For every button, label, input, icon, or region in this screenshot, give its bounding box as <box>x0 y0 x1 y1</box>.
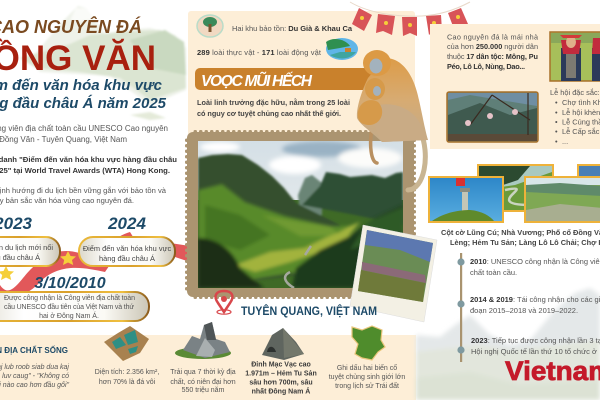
text: area: hơn 70% là đá vôi <box>99 379 156 386</box>
background: faded mountains behind title <box>20 6 186 120</box>
photo: Lung Cu flag tower <box>429 177 503 222</box>
text: festivals: • <box>555 127 558 136</box>
flag 5 <box>448 8 468 29</box>
milestone 2024: 2024 <box>107 214 146 233</box>
text: festivals: • <box>555 137 558 146</box>
icon: conservation logo <box>197 15 223 37</box>
gallery caption <box>441 228 600 247</box>
panel: geology band <box>0 322 416 400</box>
icon: wildlife habitat <box>326 38 358 60</box>
milestone 3/10/2010: hai ở Đông Nam Á. <box>39 311 99 320</box>
panel: stamp photo <box>186 132 414 298</box>
icon: map <box>104 326 149 361</box>
text: ethnic groups: Péo, Lô Lô, Nùng, Dao... <box>447 62 525 71</box>
polaroid photo <box>350 225 437 322</box>
timeline item 2010 <box>457 257 600 277</box>
milestone 2024: Điểm đến văn hóa khu vực <box>83 244 171 253</box>
panel: conservation <box>188 11 415 136</box>
monkey head <box>363 50 391 76</box>
bunting flags <box>350 2 470 36</box>
milestone 3/10/2010: 3/10/2010 <box>34 275 106 292</box>
milestone 2024 <box>79 214 175 266</box>
text: ethnic groups: thuộc 17 dân tộc: Mông, Pu <box>447 52 538 61</box>
text: Mac Vac peak <box>245 362 317 396</box>
timeline item 2010: chất toàn cầu. <box>470 268 517 277</box>
quote text <box>0 364 70 389</box>
photo: peach blossom <box>447 92 538 142</box>
ribbon and stars <box>0 232 190 300</box>
photo: winding pass <box>478 165 553 211</box>
milestone 2023 <box>0 214 60 266</box>
text: ethnic groups: của hơn 250.000 người dân <box>447 42 538 51</box>
flag 2 <box>376 14 395 35</box>
photo gallery <box>429 165 600 247</box>
banner: golden snub-nosed monkey <box>195 68 375 90</box>
text: extinction events <box>329 363 405 390</box>
text: monkey description: Loài linh trưởng đặc hữu, nằm trong 25 loài <box>197 98 350 107</box>
milestone 3/10/2010 <box>0 275 149 321</box>
text: geological eras: chất, có niên đại hơn <box>170 377 236 386</box>
monkey tails <box>371 128 377 163</box>
main photo: karst valley <box>198 141 403 288</box>
photo: valley village <box>525 177 600 222</box>
monkey body <box>357 58 428 142</box>
timeline <box>457 253 600 362</box>
intro text <box>0 124 177 205</box>
text: monkey description <box>197 98 350 118</box>
text: Mac Vac peak: sâu hơn 700m, sâu <box>249 380 313 386</box>
baby monkey <box>358 78 385 125</box>
text: extinction events: tuyệt chủng sinh giới lớn <box>329 373 405 381</box>
text: Mac Vac peak: 1.971m – Hẻm Tu Sản <box>245 370 317 378</box>
icon: rocks <box>175 322 231 359</box>
text: species count: 289 loài thực vật - 171 loài động vật <box>197 48 322 57</box>
icon: dark mountain <box>262 328 304 360</box>
text: area <box>95 369 159 386</box>
location label: TUYÊN QUANG, VIỆT NAM <box>241 305 377 318</box>
timeline item 2014 and 2019 <box>457 295 600 315</box>
title <box>0 16 167 112</box>
flag 3 <box>402 17 417 36</box>
stamp frame <box>186 132 414 298</box>
timeline item 2014 and 2019: đoạn 2015–2018 và 2019–2022. <box>470 306 578 315</box>
intro text: Đồng Văn - Tuyên Quang, Việt Nam <box>0 135 127 144</box>
photo: far corner <box>578 165 600 177</box>
flag 4 <box>426 15 442 35</box>
text: festivals: ... <box>562 137 568 146</box>
text: festivals: • <box>555 108 558 117</box>
text: area: Diện tích: 2.356 km², <box>95 369 159 376</box>
quote text: luv caug" - "Không có <box>2 373 69 380</box>
photo: ethnic women <box>550 32 600 81</box>
timeline item 2023 <box>457 336 600 356</box>
text: festivals: • <box>555 98 558 107</box>
timeline item 2023: Hội nghị Quốc tế lần thứ 10 tổ chức ở <box>471 347 597 356</box>
icon: monkey with baby <box>357 50 428 190</box>
banner: golden snub-nosed monkey: VOỌC MŨI HẾCH <box>201 72 313 90</box>
milestone 2024: hàng đầu châu Á <box>99 254 155 263</box>
text: ethnic groups <box>447 32 539 71</box>
text: geological eras <box>170 369 236 394</box>
text: Mac Vac peak: nhất Đông Nam Á <box>252 386 310 396</box>
text: ethnic groups: Cao nguyên đá là mái nhà <box>447 32 539 42</box>
background: faded mountains bottom right <box>416 288 600 400</box>
text: geological eras: 550 triệu năm <box>182 387 225 394</box>
text: extinction events: trong lịch sử Trái đất <box>335 381 399 390</box>
text: geological eras: Trải qua 7 thời kỳ địa <box>170 369 236 376</box>
timeline item 2023: 2023: Tiếp tục được công nhận lần 3 tại <box>471 336 600 345</box>
text: festivals: Lễ hội đặc sắc: <box>550 88 600 97</box>
text: monkey description: có nguy cơ tuyệt chủng cao nhất thế giới. <box>197 109 341 118</box>
text: festivals: • <box>555 118 558 126</box>
text: Mac Vac peak: Đỉnh Mạc Vạc cao <box>251 362 311 368</box>
text: extinction events: Ghi dấu hai biến cố <box>337 363 397 372</box>
flag 1 <box>352 8 372 31</box>
panel: people and festivals <box>430 24 600 149</box>
milestone 3/10/2010: cầu UNESCO đầu tiên của Việt Nam và thứ <box>4 302 134 311</box>
text: two conservation areas: Hai khu bảo tồn: Du Già & Khau Ca <box>232 24 353 33</box>
icon: location pin <box>216 291 232 314</box>
text: festivals <box>550 88 600 146</box>
icon: green land <box>352 326 385 360</box>
milestone 3/10/2010: Được công nhận là Công viên địa chất toàn <box>4 293 135 302</box>
monkey face <box>370 58 382 74</box>
